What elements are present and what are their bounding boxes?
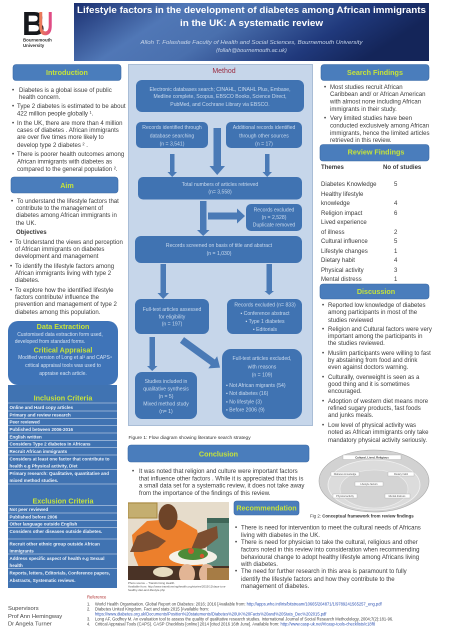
panel: introduction: health concern. [19, 95, 61, 101]
box: records excluded 833: ▪ Conference abstract [240, 311, 290, 317]
panel: discussion: • [322, 303, 324, 309]
panel: discussion: • [322, 375, 324, 381]
panel: recommendation: with diabetes. [240, 562, 278, 568]
panel: search findings: • [324, 116, 326, 122]
panel: aim and objectives: Objectives [16, 230, 47, 236]
panel: recommendation: The need for further research in this area is paramount to fully [241, 569, 408, 575]
arrow: full text to studies included [147, 337, 158, 371]
box: records screened: (n = 1,030) [207, 251, 232, 257]
panel: conclusion: that influence other factors . While it is appreciated that this is [139, 476, 303, 482]
panel: review findings table: 4 [394, 201, 398, 207]
panel: conclusion: Conclusion [199, 450, 238, 458]
panel: introduction: 422 million people globally ¹. [17, 112, 94, 118]
panel: aim and objectives: • [10, 264, 12, 270]
panel: aim and objectives: diabetes among this population. [15, 310, 101, 316]
panel: search findings: • [324, 85, 326, 91]
panel: review findings table [320, 144, 429, 283]
panel: method flow diagram [128, 64, 312, 426]
panel: aim and objectives: To identify the lifestyle factors among [15, 264, 114, 270]
panel: data extraction and critical appraisal: critical appraisal tools was used to [25, 363, 101, 369]
title banner: Alloh T. Folashade Faculty of Health and Social Sciences, Bournemouth University [139, 40, 364, 46]
box: additional records: (n = 17) [255, 142, 273, 148]
panel: search findings: Very limited studies have been [330, 116, 412, 122]
reference list: Critical Appraisal Tools (CAPS). CASP Checklists [online] 2014 [cited 2016 16th June]. Available from: http://www.casp-uk.net/#!casp-tools-checklists/c18f8 [95, 622, 376, 626]
panel: aim and objectives: diabetes. [15, 278, 40, 284]
panel: inclusion criteria: Recruit African immigrants [10, 449, 68, 454]
panel: recommendation: factors noted in this review into consideration when recommending [241, 548, 419, 554]
box: full-text assessed [135, 299, 209, 334]
box: records identified: (n = 3,541) [160, 142, 185, 148]
panel: review findings table: Dietary habit [321, 258, 355, 264]
panel: exclusion criteria: Published before 2006 [10, 514, 58, 520]
box: records excluded 833: Records excluded (n= 833) [234, 302, 296, 308]
supervisors [8, 606, 62, 628]
panel: exclusion criteria: Recruit other ethnic group outside African [10, 542, 100, 546]
arrow: total to excluded [208, 208, 245, 224]
panel: data extraction and critical appraisal: Data Extraction [37, 322, 89, 331]
panel: conclusion: It was noted that religion and culture were important factors [139, 469, 298, 475]
supervisors: Supervisors [8, 606, 39, 612]
panel: aim and objectives: • [10, 288, 12, 294]
panel: review findings table: 1 [394, 277, 398, 283]
panel: aim and objectives: contribute to the management of [16, 206, 103, 212]
box: electronic databases [136, 80, 304, 112]
panel: discussion: among participants in most of the [328, 310, 418, 316]
panel: discussion: good thing and it is sometimes [328, 382, 410, 388]
panel: exclusion criteria: health [10, 563, 23, 568]
arrow: records identified to total [168, 154, 177, 177]
panel: recommendation: There is need for physician to take the cultural, religious and other [241, 540, 418, 546]
box: full-text excluded: with reasons [248, 364, 277, 370]
panel: discussion: the studies reviewed. [328, 341, 385, 347]
panel: recommendation [234, 501, 421, 590]
reference list: World Health Organisation. Global Report on Diabetes: 2016; 2016 [Available from: http://apps.who.int/iris/bitstream/10665/204871/1/9789241565257_eng.pdf [95, 602, 382, 606]
reference list: Diabetes United Kingdom. Fact and stats 2015 [Available from: [95, 606, 209, 612]
panel: discussion: encouraged. [328, 389, 362, 395]
panel: search findings: immigrants, hence the limited articles [330, 131, 429, 137]
panel: data extraction and critical appraisal: Modified version of Long et al³ and CAPS⁴ [18, 355, 112, 361]
panel: inclusion criteria: English written [10, 434, 42, 440]
panel: inclusion criteria: Considers Type 2 diabetes in Africans [10, 442, 91, 446]
box: records excluded duplicates [246, 204, 302, 231]
panel: aim and objectives: To understand the lifestyle factors that [17, 199, 119, 205]
box: studies included: Studies included in [145, 379, 188, 385]
panel: recommendation: There is need for intervention to meet the cultural needs of Africans [241, 526, 421, 532]
figure 1 caption: Figure 1: Flow diagram showing literature search strategy [128, 435, 251, 441]
panel: recommendation: Recommendation [236, 504, 297, 512]
panel: search findings [321, 64, 429, 144]
panel: search findings: Search Findings [347, 68, 403, 77]
supervisors: Dr Angela Turner [8, 622, 52, 628]
box: records screened: Records screened on basis of title and abstract [166, 243, 273, 249]
panel: aim and objectives: of African immigrants on diabetes [15, 247, 104, 253]
logo: Bournemouth University: U [38, 5, 53, 42]
photo source caption: Available from: http://www.transformingthealth.org/stories/2015/12/days-to-a- [128, 584, 226, 588]
panel: review findings table: 1 [394, 249, 398, 255]
title banner [74, 3, 429, 61]
panel: aim and objectives: • [10, 240, 12, 246]
panel: aim and objectives: the UK. [16, 221, 36, 227]
box: records excluded 833 [227, 299, 302, 334]
box: records excluded duplicates: Duplicate removed [253, 222, 295, 228]
panel: discussion [320, 284, 433, 444]
box: full-text excluded [222, 349, 302, 419]
panel: data extraction and critical appraisal: developed from standard forms. [15, 339, 85, 345]
chart: conceptual framework diagram: Physical activity [336, 495, 355, 498]
chart: conceptual framework diagram [319, 450, 429, 512]
panel: review findings table: Diabetes Knowledge [321, 182, 377, 188]
panel: review findings table: 2 [394, 230, 398, 236]
panel: exclusion criteria: immigrants [10, 548, 34, 554]
chart: conceptual framework diagram: Lifestyle factors [360, 483, 378, 486]
box: records identified [136, 122, 208, 148]
panel: discussion: refined sugary products, fast foods [328, 406, 421, 412]
panel: review findings table: No of studies [383, 165, 422, 171]
panel: aim and objectives: development and management [15, 254, 99, 260]
panel: review findings table: 6 [394, 211, 398, 217]
panel: aim and objectives: factors contribute/ influence the [15, 295, 100, 301]
panel: review findings table: of illness [321, 230, 345, 236]
panel: review findings table: Religion impact [321, 211, 363, 217]
box: full-text excluded: ▪ Not diabetes (16) [226, 391, 269, 397]
panel: data extraction and critical appraisal [8, 321, 118, 385]
panel: discussion: by abstaining from food and drink [328, 358, 418, 364]
panel: data extraction and critical appraisal: appraise each article. [39, 371, 87, 377]
panel: review findings table: 3 [394, 268, 398, 274]
logo: Bournemouth University: University [23, 43, 45, 48]
panel: aim and objectives: prevention and management of type 2 [15, 302, 117, 308]
box: studies included: (n = 5) [159, 394, 174, 400]
panel: recommendation: • [235, 526, 237, 532]
panel: recommendation: identify the lifestyle factors and how they contribute to the [241, 577, 395, 583]
panel: search findings: conducted exclusively among African [330, 124, 429, 130]
box: full-text excluded: ▪ No lifestyle (3) [226, 400, 262, 406]
box: electronic databases: Medline complete, Scopus, EBSCO Books, Science Direct, [153, 94, 287, 100]
panel: introduction: compared to the general population ². [17, 167, 118, 173]
panel: conclusion: a small data set for a systematic review, it does not take away [139, 484, 305, 490]
reference list: Reference [87, 594, 107, 600]
box: full-text excluded: ▪ Before 2006 (9) [226, 408, 265, 414]
box: full-text excluded: (n = 109) [252, 372, 273, 378]
box: records excluded 833: ▪ Editorials [253, 327, 278, 333]
panel: discussion: • [322, 351, 324, 357]
panel: inclusion criteria: health e.g Physical activity, Diet [10, 464, 78, 468]
panel: discussion: Culturally, overweight is seen as a [328, 375, 420, 381]
panel: recommendation: behavioural change to adopt healthy lifestyle among Africans living [241, 555, 419, 561]
logo: Bournemouth University: B [22, 5, 45, 42]
panel: exclusion criteria: Considers other diseases outside diabetes. [10, 529, 102, 534]
reference list: 3. [87, 616, 90, 622]
panel: review findings table: Cultural influence [321, 239, 368, 245]
panel: discussion: Reported low knowledge of diabetes [328, 303, 426, 309]
panel: discussion: mandatory physical activity seriously. [328, 438, 427, 444]
panel: exclusion criteria: Not peer reviewed [10, 507, 49, 512]
reference list: Long AF, Godfrey M. An evaluation tool to assess the quality of qualitative research studies. International Journal of Social Research Methodology, 2004;7(2):181-96. [95, 616, 393, 622]
logo: Bournemouth University [22, 5, 53, 48]
box: additional records: Additional records identified [233, 125, 295, 131]
panel: review findings table: Healthy lifestyle [321, 192, 364, 198]
logo: Bournemouth University: Bournemouth [23, 38, 52, 42]
panel: search findings: Most studies recruit African [330, 85, 403, 91]
panel: exclusion criteria: Address specific aspect of health e.g Sexual [10, 556, 105, 561]
box: records screened [135, 236, 302, 263]
panel: discussion: • [322, 399, 324, 405]
heading: method: Method [212, 68, 236, 75]
panel: review findings table: 5 [394, 182, 398, 188]
panel: inclusion criteria: Primary research: Qualitative, quantitative and [10, 471, 109, 476]
box: full-text excluded: Full-text articles excluded, [233, 356, 291, 362]
panel: introduction: cases of diabetes . African immigrants [17, 128, 119, 134]
panel: introduction: • [12, 88, 14, 94]
panel: discussion: Muslim participants were willing to fast [328, 351, 431, 357]
figure 2 caption: Fig 2: Conceptual framework from review findings [310, 514, 414, 518]
box: records excluded duplicates: Records excluded [254, 208, 295, 214]
box: records excluded duplicates: (n = 2,528) [262, 215, 287, 221]
panel: introduction: Diabetes is a global issue of public [19, 88, 112, 94]
panel: aim and objectives [10, 177, 123, 316]
panel: discussion: even against doctors warning. [328, 365, 409, 371]
reference list: https://www.diabetes.org.uk/Documents/Position%20statements/Diabetes%20UK%20Facts%20and%20Stats_Dec%202015.pdf [95, 612, 327, 616]
box: records identified: database searching [150, 134, 194, 140]
box: studies included: (n= 1) [159, 409, 173, 415]
panel: introduction: There is poorer health outcomes among [17, 152, 124, 158]
arrow: screened to excluded [264, 264, 274, 295]
box: total articles: Total numbers of articles retrieved [182, 182, 258, 188]
panel: aim and objectives: Aim [60, 181, 74, 190]
box: additional records [226, 122, 302, 148]
reference list: 4. [87, 622, 90, 626]
panel: introduction: Introduction [46, 68, 88, 77]
panel: search findings: Caribbean and/ or African American [330, 92, 425, 98]
box: full-text assessed: (n = 197) [162, 322, 183, 328]
box: full-text assessed: for eligibility [159, 314, 186, 320]
arrow: central down to total [210, 128, 225, 175]
panel: recommendation: management of diabetes. [241, 584, 310, 590]
chart: conceptual framework diagram: Diabetes knowledge [334, 473, 357, 476]
panel: review findings table: Lived experience [321, 220, 367, 226]
photo source caption: healthy-diet-and-lifestyle.php [128, 588, 165, 592]
reference list [87, 594, 393, 626]
panel: discussion: noted as African immigrants only take [328, 430, 429, 436]
panel: aim and objectives: African immigrants living with type 2 [15, 271, 112, 277]
panel: aim and objectives: • [11, 199, 13, 205]
panel: recommendation: living with diabetes in the UK. [241, 533, 320, 539]
box: full-text assessed: Full-text articles assessed [143, 307, 201, 313]
box: studies included: qualitative synthesis [143, 386, 189, 392]
panel: review findings table: Physical activity [321, 268, 365, 274]
panel: review findings table: Mental distress [321, 277, 362, 283]
panel: introduction: • [12, 104, 14, 110]
photo source caption: Photo source – Transforming Health. [128, 581, 175, 585]
panel: introduction: African immigrants with diabetes as [17, 160, 112, 166]
panel: introduction [12, 64, 126, 173]
panel: conclusion [128, 445, 309, 497]
panel: introduction: are over five times more likely to [17, 135, 104, 141]
panel: inclusion criteria: Peer reviewed [10, 420, 40, 424]
panel: exclusion criteria: Reports, letters, Editorials, Conference papers, [10, 570, 110, 576]
panel: aim and objectives: To explore how the identified lifestyle [15, 288, 114, 294]
panel: inclusion criteria: Online and Hard copy articles [10, 405, 74, 410]
reference list: 1. [87, 602, 90, 606]
panel: search findings: immigrants in their study. [330, 107, 397, 113]
panel: conclusion: • [132, 469, 134, 475]
arrow: additional records to total [262, 154, 272, 177]
chart: conceptual framework diagram: Dietary habit [394, 473, 408, 476]
panel: review findings table: 4 [394, 258, 398, 264]
title banner: (follah@bournemouth.ac.uk) [216, 48, 287, 54]
box: records excluded 833: ▪ Type 1 diabetes [245, 319, 285, 325]
box: electronic databases: Electronic databases search; CINAHL, CINAHL Plus, Embase, [149, 87, 291, 93]
panel: introduction: • [12, 121, 14, 127]
panel: exclusion criteria: Abstracts, Systematic reviews. [10, 578, 76, 583]
panel: review findings table: 5 [394, 239, 398, 245]
panel: data extraction and critical appraisal: Critical Appraisal [34, 346, 92, 354]
photo: man eating salad [128, 502, 229, 584]
panel: discussion: Adoption of western diet means more [328, 399, 429, 405]
panel: recommendation: • [235, 540, 237, 546]
panel: search findings: with almost none including African [329, 100, 421, 106]
box: additional records: through other sources [239, 134, 289, 140]
panel: aim and objectives: To Understand the views and perception [15, 240, 123, 246]
box: studies included: Mixed method study [143, 402, 189, 408]
panel: review findings table: knowledge [321, 201, 351, 207]
panel: exclusion criteria [8, 487, 117, 588]
panel: inclusion criteria: mixed method studies. [10, 478, 58, 483]
photo source caption [128, 581, 226, 592]
reference list: 2. [87, 606, 90, 612]
arrow: total to screened [197, 201, 210, 236]
panel: search findings: retrieved in this review. [330, 138, 392, 144]
panel: review findings table: Themes [321, 165, 344, 171]
box: studies included [135, 372, 197, 419]
panel: inclusion criteria: Primary and review research [10, 412, 71, 418]
panel: discussion: • [322, 327, 324, 333]
panel: conclusion: from the importance of the findings of this review. [139, 491, 271, 497]
panel: exclusion criteria: Exclusion Criteria [32, 496, 95, 506]
panel: data extraction and critical appraisal: Customised data extraction form used, [17, 332, 103, 338]
panel: discussion: • [322, 423, 324, 429]
panel: introduction: • [12, 152, 14, 158]
panel: discussion: studies reviewed [328, 318, 373, 324]
panel: discussion: Low level of physical activity was [328, 423, 416, 429]
title banner: Lifestyle factors in the development of diabetes among African immigrants [77, 5, 426, 16]
title banner: in the UK: A systematic review [180, 18, 324, 29]
box: full-text excluded: ▪ Not African migrants (54) [226, 383, 286, 389]
panel: introduction: Type 2 diabetes is estimated to be about [17, 104, 126, 110]
chart: conceptual framework diagram: Mental distress [389, 495, 406, 498]
panel: aim and objectives: diabetes among African immigrants in [16, 213, 117, 219]
arrow: full text to excluded with reasons [178, 334, 224, 374]
panel: review findings table: Review Findings [348, 148, 404, 156]
panel: discussion: and junks meals. [328, 413, 374, 419]
panel: review findings table: Lifestyle changes [321, 249, 368, 255]
box: electronic databases: PubMed, and Cochrane Library via EBSCO. [170, 102, 270, 108]
panel: inclusion criteria: Published between 2006-2016 [10, 427, 74, 432]
box: total articles [138, 177, 302, 200]
panel: discussion: Discussion [357, 287, 395, 296]
panel: discussion: important among the participants in [328, 334, 422, 340]
panel: introduction: develop type 2 diabetes ² . [17, 143, 88, 149]
panel: inclusion criteria [8, 385, 117, 487]
panel: inclusion criteria: Inclusion Criteria [34, 394, 93, 402]
panel: inclusion criteria: Considers at least one factor that contribute to [10, 456, 110, 462]
box: records identified: Records identified through [142, 125, 202, 131]
panel: exclusion criteria: Other language outside English [10, 522, 78, 526]
supervisors: Prof Ann Hemingway [8, 614, 62, 620]
panel: discussion: Religion and Cultural factors were very [328, 327, 433, 333]
chart: conceptual framework diagram: Cultural, Lived, Religious [355, 455, 389, 459]
box: total articles: (n= 3,558) [208, 190, 232, 196]
panel: introduction: In the UK, there are more than 4 million [17, 121, 123, 127]
arrow: screened to full text [158, 264, 169, 299]
panel: recommendation: • [235, 569, 237, 575]
